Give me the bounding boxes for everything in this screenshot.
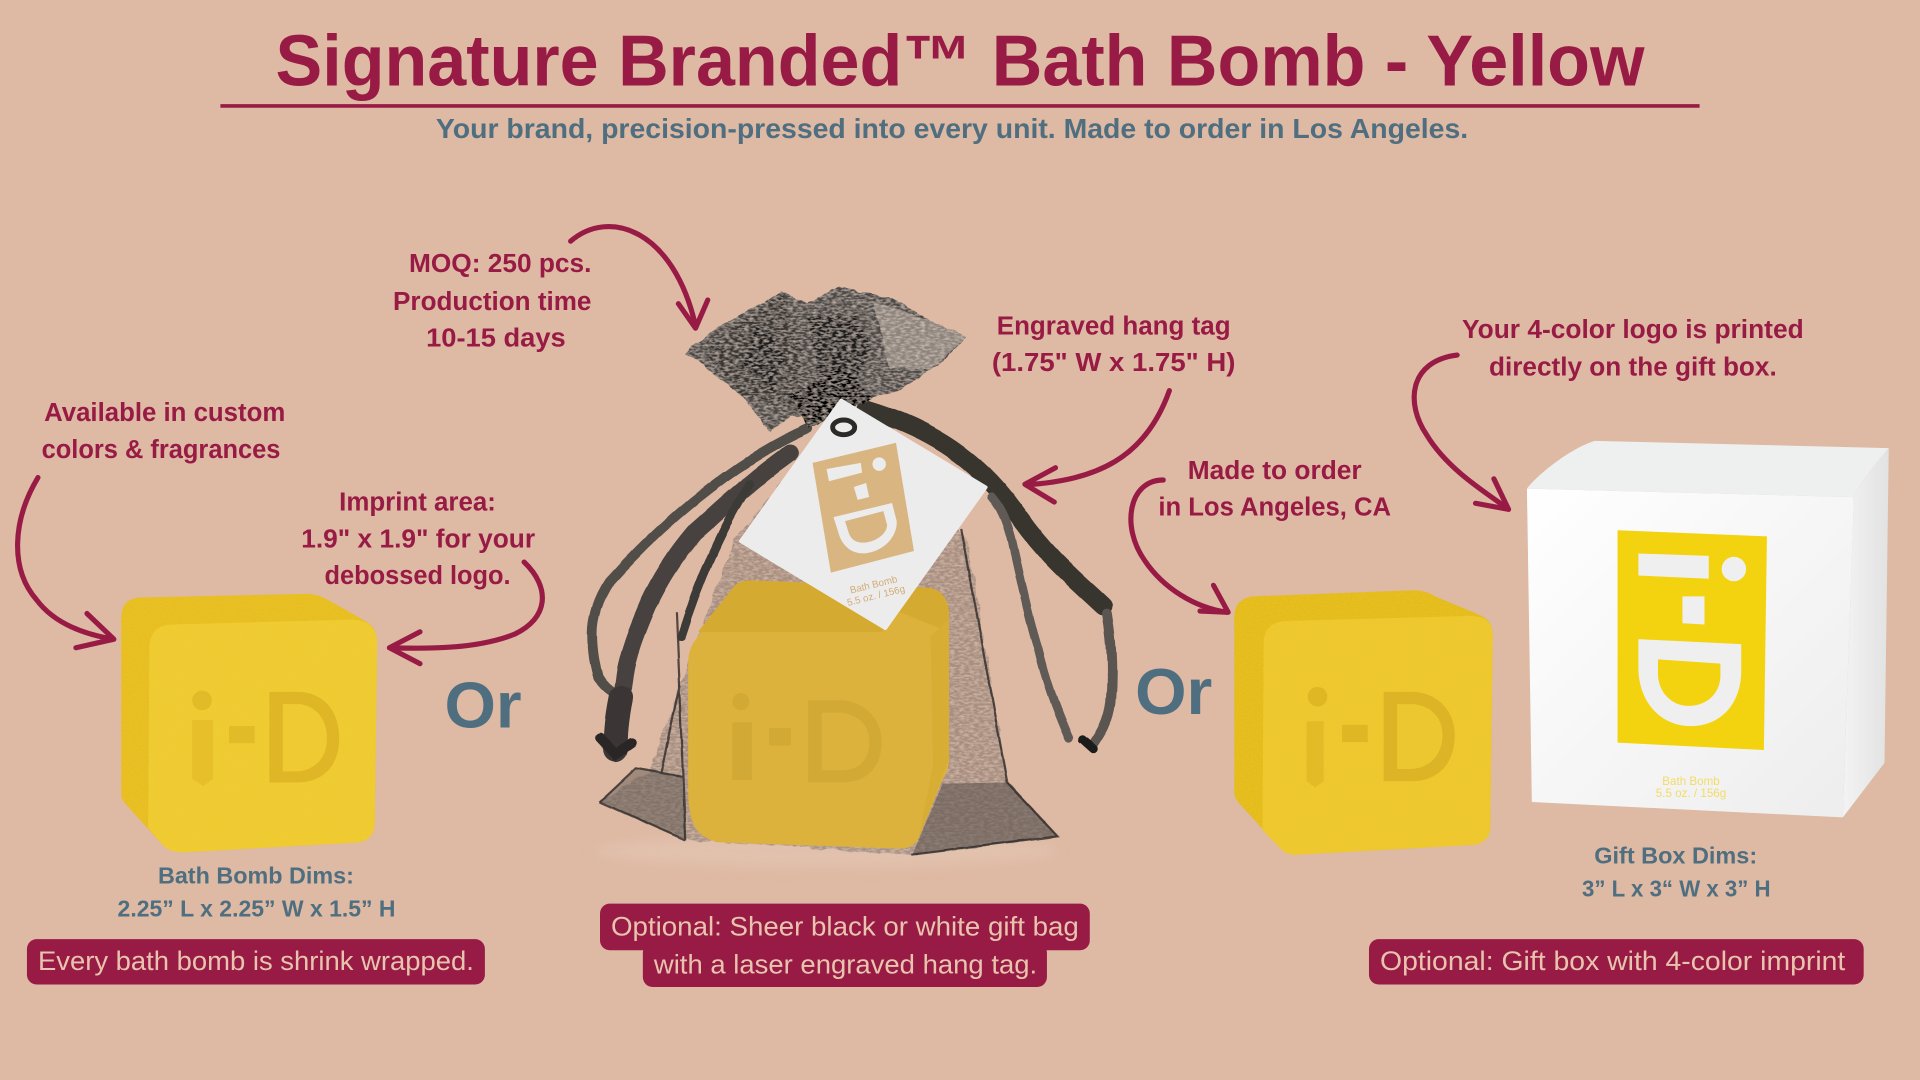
gift box dimensions: Gift Box Dims:: [1594, 842, 1757, 868]
bath bomb dimensions: 2.25” L x 2.25” W x 1.5” H: [118, 896, 396, 922]
subtitle: Your brand, precision-pressed into every unit. Made to order in Los Angeles.: [436, 113, 1468, 144]
callout: made to order: [1158, 457, 1391, 522]
pill: optional gift box: Optional: Gift box with 4-color imprint: [1380, 946, 1846, 976]
pill: optional gift bag: [600, 904, 1090, 987]
title: Signature Branded™ Bath Bomb - Yellow: [276, 22, 1645, 102]
gift box text: 5.5 oz. / 156g: [1656, 787, 1726, 800]
callout: 4-color logo: Your 4-color logo is printed: [1462, 316, 1804, 344]
arrow: gift box: [1414, 355, 1509, 509]
callout: imprint area: Imprint area:: [339, 489, 496, 517]
pill: shrink wrapped: [27, 939, 485, 984]
gathered top: [686, 287, 966, 432]
callout: custom colors: [42, 399, 285, 464]
callout: MOQ and production time: Production time: [393, 288, 591, 316]
gift box text: Bath Bomb: [1662, 775, 1720, 788]
bath bomb left: [121, 594, 377, 852]
gift box: [1527, 441, 1889, 817]
gift bag with hang tag: [593, 287, 1112, 868]
sheer bag body: [594, 465, 1059, 868]
callout: engraved hang tag: [992, 312, 1236, 377]
title underline: [220, 104, 1700, 107]
hang tag logo: [827, 457, 897, 553]
bath bomb right: [1234, 590, 1493, 855]
callout: MOQ and production time: [393, 250, 591, 353]
arrow: MOQ to gift bag: [571, 227, 708, 328]
callout: imprint area: 1.9" x 1.9" for your: [301, 525, 535, 553]
debossed logo: [732, 693, 882, 782]
callout: 4-color logo: [1462, 316, 1804, 381]
callout: 4-color logo: directly on the gift box.: [1489, 353, 1777, 381]
arrow: made to order: [1131, 480, 1228, 612]
callout: MOQ and production time: MOQ: 250 pcs.: [409, 250, 591, 278]
ribbons: [593, 409, 1112, 754]
bath bomb dimensions: Bath Bomb Dims:: [158, 862, 354, 888]
Or: left: Or: [444, 668, 522, 741]
hang tag: [741, 400, 986, 628]
callout: custom colors: colors & fragrances: [42, 436, 280, 464]
gift box dimensions: [1582, 842, 1771, 901]
hang tag text: 5.5 oz. / 156g: [846, 584, 906, 609]
debossed logo: [1307, 687, 1455, 787]
bomb in bag: [688, 580, 949, 849]
arrow: hang tag: [1025, 391, 1169, 502]
callout: made to order: Made to order: [1188, 457, 1362, 485]
callout: engraved hang tag: Engraved hang tag: [997, 312, 1231, 340]
arrow: custom colors: [18, 478, 114, 648]
bath bomb dimensions: [118, 862, 396, 922]
callout: made to order: in Los Angeles, CA: [1158, 494, 1391, 522]
callout: engraved hang tag: (1.75" W x 1.75" H): [992, 349, 1236, 377]
gift box dimensions: 3” L x 3“ W x 3” H: [1582, 875, 1771, 901]
debossed logo: [192, 691, 339, 786]
callout: MOQ and production time: 10-15 days: [426, 325, 566, 353]
gift box logo: [1638, 553, 1746, 726]
pill: optional gift bag: with a laser engraved hang tag.: [653, 949, 1037, 979]
pill: shrink wrapped: Every bath bomb is shrink wrapped.: [38, 946, 474, 976]
callout: custom colors: Available in custom: [44, 399, 285, 427]
callout: imprint area: [301, 489, 535, 590]
gift box text: [1656, 775, 1726, 800]
pill: optional gift bag: Optional: Sheer black or white gift bag: [611, 912, 1079, 942]
hang tag text: Bath Bomb: [849, 574, 899, 597]
callout: imprint area: debossed logo.: [324, 562, 511, 590]
Or: right: Or: [1135, 655, 1212, 728]
printed logo panel: [1618, 530, 1767, 750]
pill: optional gift box: [1369, 939, 1864, 984]
arrow: imprint area: [389, 562, 542, 664]
